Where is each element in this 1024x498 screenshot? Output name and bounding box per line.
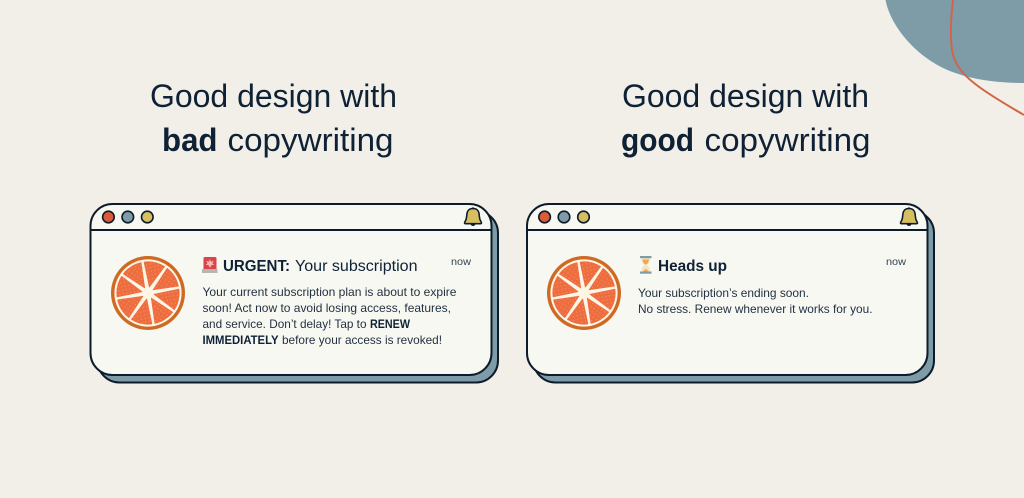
card window [527,204,928,375]
notification body: No stress. Renew whenever it works for you. [638,302,872,316]
heading: good design with bad copywriting: bad [162,122,218,158]
timestamp: now [886,256,906,268]
panel: bad copywriting notification [90,204,498,382]
decorative curve: top right [951,0,1024,115]
notification body [202,285,457,347]
card window [90,204,492,375]
heading: good design with good copywriting: Good design with [622,78,869,114]
notification body: and service. Don’t delay! Tap to [202,317,367,331]
icon: orange slice [111,256,185,330]
icon: orange slice [547,256,621,330]
notification body: soon! Act now to avoid losing access, features, [202,301,451,315]
panel: good copywriting notification [527,204,934,382]
notification body: Your subscription’s ending soon. [638,286,809,300]
icon: bell [465,207,481,226]
decorative blob: top right [886,0,1024,83]
notification title: Your subscription [295,258,418,275]
heading: good design with good copywriting: good [621,122,694,158]
notification title [223,258,418,275]
icon: hourglass [640,256,652,274]
icon: siren [202,257,218,273]
notification title: URGENT: [223,258,290,275]
notification body: before your access is revoked! [282,333,442,347]
heading: good design with bad copywriting: Good design with [150,78,397,114]
notification body: RENEW [370,317,411,331]
notification body [638,286,872,316]
timestamp: now [451,256,471,268]
window buttons [539,211,589,223]
window buttons [103,211,153,223]
notification body: Your current subscription plan is about to expire [202,285,457,299]
card shadow [98,211,498,382]
heading: good design with bad copywriting: copywriting [228,122,394,158]
heading: good design with good copywriting [621,78,870,158]
notification title: Heads up [658,258,727,275]
card shadow [534,211,934,382]
icon: bell [901,207,917,226]
notification body: IMMEDIATELY [202,333,278,347]
heading: good design with good copywriting: copywriting [704,122,870,158]
heading: good design with bad copywriting [150,78,397,158]
